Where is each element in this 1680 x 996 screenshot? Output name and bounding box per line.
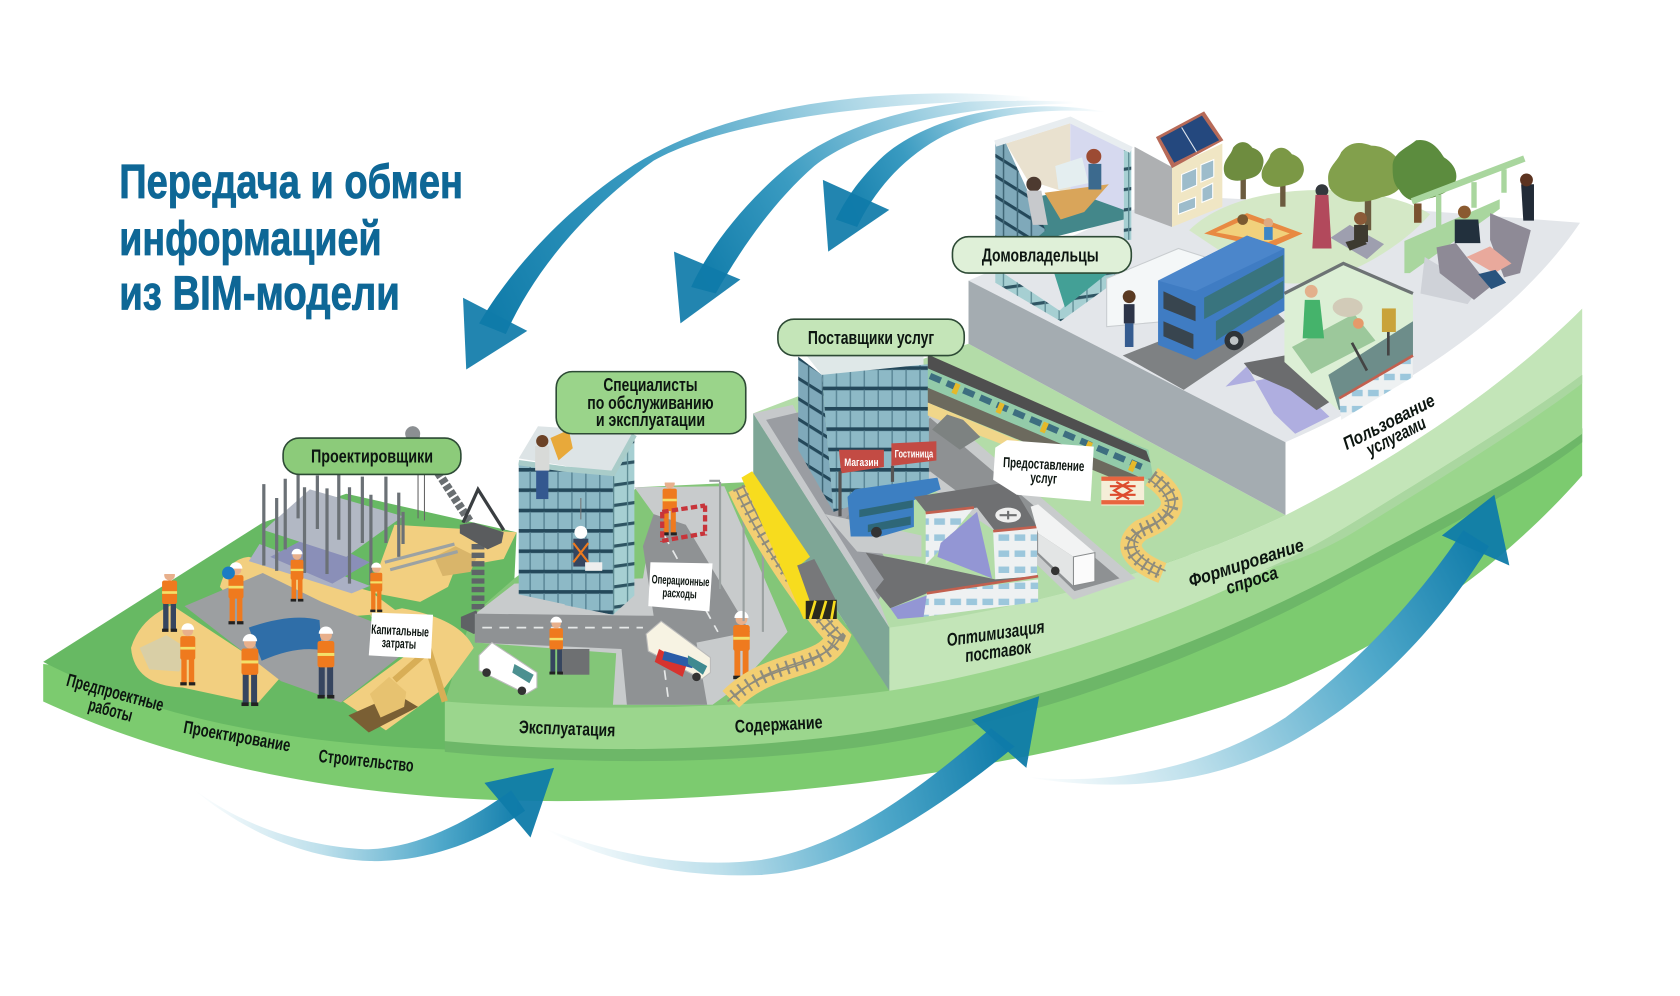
stage label: operation: Эксплуатация: [519, 717, 616, 740]
worker: shovel: [180, 623, 195, 685]
lamp posts: [709, 481, 763, 632]
boy at stop: [1123, 290, 1136, 347]
bottom arrow: 1: [191, 768, 554, 861]
label: designers: Проектировщики: [311, 447, 433, 467]
hospital: [866, 482, 1038, 619]
label: designers: [283, 438, 461, 474]
railway track: [728, 485, 841, 701]
note: capital costs: [369, 613, 433, 659]
stage label: pre-design: работы: [86, 695, 135, 726]
worker: holding model left: [242, 634, 258, 706]
block: service use: [969, 190, 1582, 515]
worker: blue helmet digger: [228, 562, 243, 624]
stage label: supply optimisation: поставок: [964, 637, 1033, 666]
construction site: [131, 426, 517, 733]
stage label: pre-design: [60, 670, 166, 733]
bus shelter: [1107, 248, 1205, 327]
office tower: [798, 349, 929, 512]
rail sign: [1101, 477, 1144, 505]
van: courier: [646, 621, 710, 681]
worker: surveyor: [162, 568, 177, 632]
car: [932, 414, 980, 450]
house with solar panels: [1135, 111, 1223, 227]
layer 2 top face: operations ground: [445, 482, 889, 708]
label: maintenance specialists: [556, 372, 746, 434]
road on layer 3: [825, 403, 1136, 600]
worker: on frame: [291, 549, 303, 602]
stage label: pre-design: Предпроектные: [65, 670, 166, 715]
crane: [405, 426, 504, 634]
worker: painting on roof: [535, 430, 573, 499]
office with residents: [995, 120, 1131, 321]
truck: [1031, 504, 1095, 586]
man on bench: [1331, 212, 1384, 259]
label: maintenance specialists: Специалисты: [603, 375, 698, 395]
label: homeowners: [952, 237, 1131, 273]
note: capital costs: Капитальные: [371, 622, 429, 640]
worker: holding model right: [318, 627, 334, 699]
base layer: outer green band: [43, 428, 1582, 801]
stage label: construction: Строительство: [318, 746, 415, 776]
top arrow: to maintenance: [674, 99, 1093, 323]
stage label: demand forming: спроса: [1223, 563, 1280, 598]
label: homeowners: Домовладельцы: [982, 245, 1099, 265]
stage label: demand forming: Формирование: [1186, 535, 1306, 591]
layer 1 top face: construction ground: [43, 494, 517, 750]
mid band shadow: [445, 428, 1582, 761]
stage label: demand forming: [1186, 535, 1312, 608]
train: [928, 354, 1154, 488]
stage label: service use: [1339, 390, 1446, 468]
yellow maintenance train: [741, 471, 837, 619]
service providers zone: [798, 349, 1175, 619]
worker: near note: [370, 562, 382, 612]
note: service provision: Предоставление: [1003, 455, 1085, 475]
operations zone: [475, 426, 841, 705]
excavator: [348, 650, 445, 733]
trees: [1224, 140, 1456, 230]
sandbox with children: [1204, 213, 1303, 248]
track to station: [1128, 474, 1175, 575]
shop signs: Магазин: [844, 457, 879, 469]
van: white: [479, 643, 537, 695]
note: operating costs: [648, 562, 713, 612]
concrete frame under construction: [249, 471, 458, 593]
road below bus: [1123, 300, 1286, 390]
label: maintenance specialists: по обслуживанию: [587, 393, 714, 413]
stage label: supply optimisation: Оптимизация: [945, 617, 1046, 650]
note: operating costs: Операционные: [651, 572, 710, 589]
note: operating costs: расходы: [662, 586, 697, 601]
bottom arrow: 3: [1023, 495, 1509, 785]
blue bus: [847, 478, 941, 538]
stage label: design: Проектирование: [182, 717, 292, 756]
note: service provision: услуг: [1030, 470, 1057, 488]
top arrow: to service providers: [823, 106, 1109, 252]
worker: rail maintenance: [733, 611, 750, 679]
road network: [475, 486, 788, 705]
note: service provision: [993, 440, 1094, 501]
stage label: service use: услугами: [1362, 413, 1429, 460]
stage label: supply optimisation: [945, 617, 1048, 668]
title: информацией: [119, 212, 382, 266]
layer 3 top face and wall: [753, 344, 1286, 691]
sand and gravel patches: [131, 525, 517, 730]
service users zone: [995, 111, 1534, 434]
office tower under maintenance: [519, 426, 634, 615]
solar-blue model held by workers: [249, 618, 322, 661]
title: [119, 155, 463, 321]
title: из BIM-модели: [119, 267, 400, 321]
worker: abseiling: [573, 498, 602, 571]
shop signs: Гостиница: [895, 448, 934, 460]
stage label: maintenance: Содержание: [734, 712, 823, 737]
woman in long dress: [1312, 184, 1332, 248]
title: Передача и обмен: [119, 155, 463, 209]
stage label: service use: Пользование: [1339, 390, 1438, 454]
operating theatre: [1226, 263, 1413, 434]
double-decker bus: [1158, 236, 1284, 360]
seated worker: [549, 617, 589, 675]
label: maintenance specialists: и эксплуатации: [596, 410, 705, 430]
top arrow: to designers: [463, 93, 1071, 369]
light band: [889, 308, 1582, 691]
road barrier: [662, 505, 705, 542]
worker: at barrier: [663, 476, 677, 535]
train interior: [1404, 159, 1534, 304]
note: capital costs: затраты: [381, 635, 417, 652]
bottom arrow: 2: [541, 696, 1039, 875]
mid band: [445, 375, 1582, 749]
shop signs: [839, 441, 936, 516]
label: service providers: Поставщики услуг: [808, 328, 935, 348]
label: service providers: [778, 319, 964, 356]
